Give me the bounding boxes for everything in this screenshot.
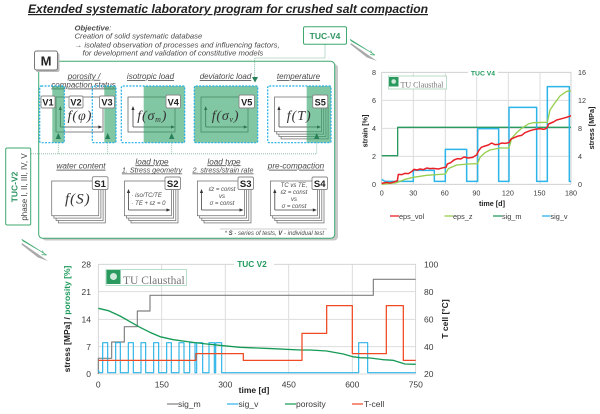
labels: V and S tags: S5 bbox=[315, 97, 326, 107]
card: load type stress geometry S2: · iso/TC/TE bbox=[132, 193, 163, 199]
axis labels: 150 bbox=[534, 188, 546, 198]
group: deviatoric load column: ) bbox=[233, 109, 239, 124]
axis labels: stress [MPa] bbox=[587, 107, 596, 149]
axis labels: 60 bbox=[424, 314, 434, 324]
axis labels: 600 bbox=[345, 380, 360, 390]
card: load type stress geometry S2: S2 bbox=[167, 179, 179, 190]
label: TUC-V2 bbox=[6, 148, 31, 225]
axis labels: 0 bbox=[380, 188, 384, 198]
axis labels: stress [MPa] / porosity [%] bbox=[62, 265, 72, 372]
legend: sig_v bbox=[238, 399, 259, 409]
axis labels: 0 bbox=[86, 369, 91, 379]
legend: sig_m bbox=[178, 399, 201, 409]
group: temperature column: f(T) bbox=[287, 109, 312, 124]
legend: eps_z bbox=[453, 212, 473, 221]
card: load type stress/strain rate S3: load type bbox=[207, 157, 241, 166]
labels: V and S tags bbox=[41, 95, 328, 108]
labels: V and S tags: V5 bbox=[241, 97, 252, 107]
group: isotropic load column bbox=[121, 72, 185, 143]
connector: TUC-V2 dotted links bbox=[31, 139, 317, 154]
objective text: Creation of solid systematic database bbox=[74, 32, 202, 41]
axis labels: 4 bbox=[372, 124, 376, 133]
card: pre-compaction S4: vs bbox=[291, 197, 297, 203]
card: load type stress geometry S2: · TE + εz = 0 bbox=[132, 201, 166, 207]
series: eps_vol bbox=[382, 116, 571, 183]
axis labels: 300 bbox=[218, 380, 233, 390]
logo: TU Clausthal bbox=[106, 270, 186, 287]
series: sig_m bbox=[98, 279, 416, 374]
legend: sig_v bbox=[550, 212, 568, 221]
group: isotropic load column: f(σ bbox=[137, 109, 155, 124]
label: TUC-V4: TUC-V4 bbox=[310, 31, 341, 41]
card: load type stress/strain rate S3: σ = const bbox=[210, 201, 235, 207]
group: isotropic load column: isotropic load bbox=[127, 72, 175, 81]
card: load type stress geometry S2 bbox=[122, 157, 183, 223]
series: eps_z bbox=[382, 91, 571, 184]
footnote: * S - series of tests, V - individual test bbox=[225, 231, 324, 237]
axis labels: time [d] bbox=[479, 199, 505, 208]
axis labels: 0 bbox=[372, 180, 376, 189]
axis labels: 4 bbox=[578, 152, 582, 161]
group: isotropic load column: ) bbox=[161, 109, 167, 124]
group: deviatoric load column: f(σ bbox=[212, 109, 230, 124]
card: water content S1: water content bbox=[56, 162, 106, 171]
axis labels: T cell [°C] bbox=[440, 299, 450, 339]
axis labels: 6 bbox=[372, 96, 376, 105]
labels: V and S tags: V4 bbox=[168, 97, 180, 107]
card: pre-compaction S4: S4 bbox=[314, 179, 326, 190]
label: TUC V2: TUC V2 bbox=[237, 259, 267, 269]
label: M: M bbox=[41, 54, 51, 68]
axis labels: 14 bbox=[82, 314, 91, 324]
card: load type stress geometry S2: load type bbox=[135, 157, 169, 166]
chart: TUC V4 bbox=[360, 68, 596, 221]
group: porosity column: porosity / bbox=[67, 72, 101, 81]
axis labels bbox=[62, 259, 450, 395]
labels: V and S tags: V2 bbox=[70, 98, 82, 108]
series: sig_v bbox=[98, 343, 416, 373]
series: sig_m bbox=[382, 127, 571, 156]
card: pre-compaction S4 bbox=[267, 162, 328, 223]
card: load type stress/strain rate S3: S3 bbox=[240, 179, 252, 190]
arrow: to TUC V4 chart bbox=[350, 39, 377, 61]
axis labels: 30 bbox=[409, 188, 417, 198]
group: porosity column: compaction status bbox=[51, 80, 116, 90]
axis labels: 60 bbox=[441, 188, 449, 198]
axis labels: 28 bbox=[82, 259, 91, 269]
logo: TU Clausthal: TU Clausthal bbox=[400, 81, 444, 90]
card: load type stress/strain rate S3: vs bbox=[219, 194, 225, 200]
card: water content S1: f(S) bbox=[65, 192, 91, 208]
card: pre-compaction S4: σ = const bbox=[282, 204, 307, 210]
axis labels: 180 bbox=[565, 188, 577, 198]
label: M bbox=[34, 51, 60, 72]
axis labels: 100 bbox=[424, 259, 438, 269]
group: porosity column: f(φ) bbox=[68, 109, 92, 124]
card: load type stress geometry S2: 1. Stress geometry bbox=[122, 166, 183, 174]
legend: sig_m bbox=[502, 212, 521, 221]
axis labels: time [d] bbox=[239, 385, 270, 395]
card: pre-compaction S4: TC vs TE, bbox=[281, 183, 307, 189]
label: TUC V4: TUC V4 bbox=[471, 70, 495, 78]
labels: V and S tags: V3 bbox=[101, 98, 113, 108]
card: pre-compaction S4: pre-compaction bbox=[267, 162, 325, 171]
card: load type stress/strain rate S3: 2. stress/strain rate bbox=[191, 166, 254, 174]
series: porosity bbox=[98, 308, 416, 364]
axis labels: 90 bbox=[472, 188, 480, 198]
axis labels: 0 bbox=[578, 180, 582, 189]
legend: T-cell bbox=[364, 399, 384, 409]
group: isotropic load column: m bbox=[155, 115, 162, 124]
axis labels: 20 bbox=[424, 369, 434, 379]
axis labels: 2 bbox=[372, 152, 376, 161]
axis labels: 0 bbox=[96, 380, 101, 390]
axis labels: 21 bbox=[82, 287, 91, 297]
group: deviatoric load column: v bbox=[230, 115, 234, 124]
card: water content S1: S1 bbox=[94, 179, 107, 190]
labels: V and S tags: V1 bbox=[42, 98, 54, 108]
card: water content S1 bbox=[52, 162, 108, 223]
legend bbox=[390, 212, 568, 221]
axis labels: 750 bbox=[409, 380, 423, 390]
label: TUC-V2: TUC-V2 bbox=[10, 171, 20, 202]
legend: porosity bbox=[296, 399, 327, 409]
objective text: for development and validation of constitutive models bbox=[82, 48, 263, 58]
label: TUC-V4 bbox=[252, 27, 346, 82]
objective text bbox=[74, 24, 280, 58]
legend: eps_vol bbox=[399, 212, 425, 221]
legend bbox=[167, 399, 384, 409]
axis labels: 16 bbox=[578, 68, 586, 77]
panel: main test program bbox=[31, 61, 338, 240]
group: temperature column bbox=[268, 72, 331, 143]
group: temperature column: temperature bbox=[277, 72, 321, 81]
title: Extended systematic laboratory program for crushed salt compaction bbox=[28, 2, 428, 16]
card: pre-compaction S4: ε̇z = const bbox=[281, 190, 308, 196]
arrow: to TUC V2 chart bbox=[22, 239, 48, 261]
card: load type stress/strain rate S3: ε̇z = const bbox=[209, 187, 236, 193]
axis labels: 120 bbox=[502, 188, 514, 198]
series: sig_v bbox=[382, 87, 571, 181]
logo: TU Clausthal bbox=[388, 76, 446, 90]
axis labels: 150 bbox=[155, 380, 169, 390]
axis labels: 7 bbox=[86, 342, 91, 352]
group: deviatoric load column bbox=[194, 72, 258, 143]
axis labels: 8 bbox=[578, 124, 582, 133]
series: T-cell bbox=[98, 306, 416, 360]
objective text: → isolated observation of processes and influencing factors, bbox=[74, 40, 280, 49]
axis labels: 40 bbox=[424, 342, 434, 352]
icon: markers bbox=[56, 133, 319, 139]
axis labels bbox=[360, 68, 596, 208]
objective text: Objective: bbox=[74, 24, 111, 32]
axis labels: 8 bbox=[372, 68, 376, 77]
axis labels: 80 bbox=[424, 287, 434, 297]
footnote bbox=[220, 229, 327, 237]
group: porosity column bbox=[40, 72, 116, 143]
label: TUC-V2: phase I, II, III, IV, V bbox=[20, 153, 29, 221]
group: deviatoric load column: deviatoric load bbox=[200, 72, 252, 81]
card: load type stress/strain rate S3 bbox=[191, 157, 254, 223]
chart: TUC V2 bbox=[62, 259, 450, 409]
logo: TU Clausthal: TU Clausthal bbox=[123, 275, 185, 287]
axis labels: 450 bbox=[282, 380, 296, 390]
axis labels: strain [%] bbox=[360, 115, 370, 147]
axis labels: 12 bbox=[578, 96, 586, 105]
